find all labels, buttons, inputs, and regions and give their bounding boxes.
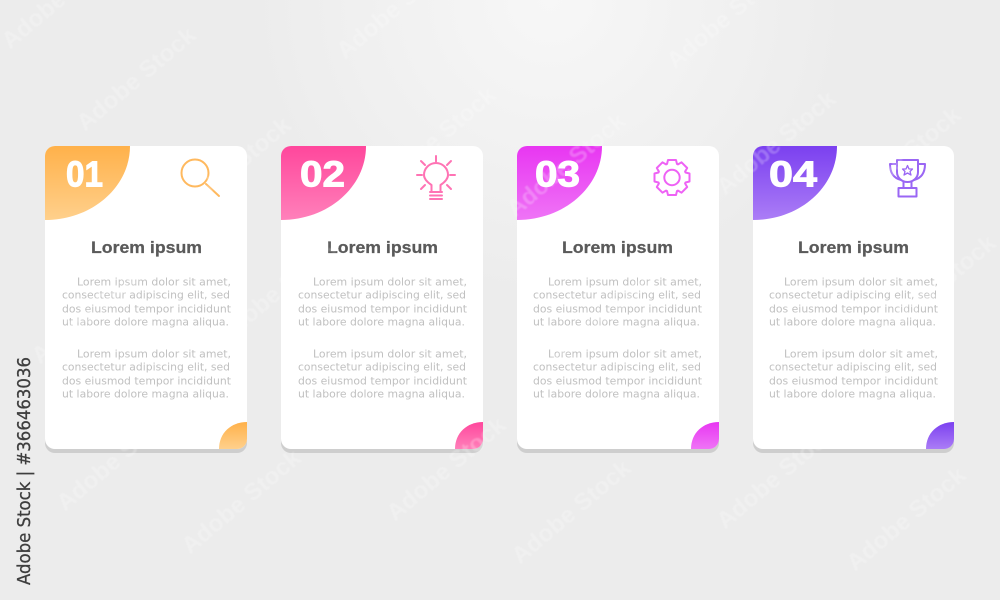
heading 2: Lorem ipsum <box>327 238 438 257</box>
text block 1b: dos eiusmod tempor incididunt <box>62 374 232 388</box>
text block 3b: dos eiusmod tempor incididunt <box>533 374 703 388</box>
text block 4b: dos eiusmod tempor incididunt <box>769 374 939 388</box>
icon: light bulb <box>417 156 455 199</box>
text block 3a: dos eiusmod tempor incididunt <box>533 302 703 316</box>
text block 2b: consectetur adipiscing elit, sed <box>298 360 466 374</box>
text block 2a: dos eiusmod tempor incididunt <box>298 302 468 316</box>
icon: gear <box>654 160 690 195</box>
text block 3a: consectetur adipiscing elit, sed <box>533 288 701 302</box>
text block 1a: ut labore dolore magna aliqua. <box>62 316 229 328</box>
corner tab 01 <box>45 146 130 220</box>
text block 1a: consectetur adipiscing elit, sed <box>62 288 230 302</box>
text block 2a: Lorem ipsum dolor sit amet, <box>313 276 467 288</box>
number 01: 01 <box>66 154 103 194</box>
corner tab 04 <box>753 146 837 220</box>
text block 3b: ut labore dolore magna aliqua. <box>533 388 700 400</box>
text block 4a: consectetur adipiscing elit, sed <box>769 288 937 302</box>
text block 4b: Lorem ipsum dolor sit amet, <box>784 348 938 360</box>
number 02: 02 <box>300 154 345 194</box>
card 2 <box>281 146 483 453</box>
text block 1a <box>62 276 232 328</box>
text block 4b <box>769 348 939 400</box>
text block 4b: ut labore dolore magna aliqua. <box>769 388 936 400</box>
watermark pattern: Adobe Stock <box>167 111 297 227</box>
text block 1b <box>62 348 232 400</box>
watermark pattern: Adobe Stock <box>837 101 967 217</box>
watermark pattern: Adobe Stock <box>27 254 157 370</box>
text block 4a <box>769 276 939 328</box>
corner accent 1 <box>219 422 247 449</box>
text block 1a: dos eiusmod tempor incididunt <box>62 302 232 316</box>
text block 1a: Lorem ipsum dolor sit amet, <box>77 276 231 288</box>
watermark pattern: Adobe Stock <box>507 454 637 570</box>
card 1 <box>45 146 247 453</box>
watermark pattern: Adobe Stock <box>372 81 502 197</box>
text block 2b: ut labore dolore magna aliqua. <box>298 388 465 400</box>
text block 2a <box>298 276 468 328</box>
watermark pattern: Adobe Stock <box>842 461 972 577</box>
watermark pattern: Adobe Stock <box>382 411 512 527</box>
number 04: 04 <box>769 154 817 194</box>
watermark pattern: Adobe Stock <box>502 107 632 223</box>
corner accent 2 <box>455 422 483 449</box>
text block 2b <box>298 348 468 400</box>
heading 3: Lorem ipsum <box>562 238 673 257</box>
text block 1b: ut labore dolore magna aliqua. <box>62 388 229 400</box>
watermark pattern: Adobe Stock <box>72 21 202 137</box>
text block 2b: Lorem ipsum dolor sit amet, <box>313 348 467 360</box>
corner accent 3 <box>691 422 719 449</box>
watermark pattern: Adobe Stock <box>52 401 182 517</box>
corner tab 03 <box>517 146 602 220</box>
text block 3a: Lorem ipsum dolor sit amet, <box>548 276 702 288</box>
text block 4b: consectetur adipiscing elit, sed <box>769 360 937 374</box>
watermark pattern: Adobe Stock <box>712 85 842 201</box>
text block 1b: consectetur adipiscing elit, sed <box>62 360 230 374</box>
heading 1: Lorem ipsum <box>91 238 202 257</box>
text block 2a: consectetur adipiscing elit, sed <box>298 288 466 302</box>
heading 4: Lorem ipsum <box>798 238 909 257</box>
icon: trophy <box>890 160 925 196</box>
text block 2b: dos eiusmod tempor incididunt <box>298 374 468 388</box>
text block 3a <box>533 276 703 328</box>
card 3 <box>517 146 719 453</box>
text block 1b: Lorem ipsum dolor sit amet, <box>77 348 231 360</box>
corner accent 4 <box>926 422 954 449</box>
text block 3b <box>533 348 703 400</box>
watermark pattern: Adobe Stock <box>177 444 307 560</box>
watermark pattern: Adobe Stock <box>712 419 842 535</box>
text block 4a: dos eiusmod tempor incididunt <box>769 302 939 316</box>
text block 3a: ut labore dolore magna aliqua. <box>533 316 700 328</box>
icon: magnifying glass <box>182 160 219 196</box>
corner tab 02 <box>281 146 366 220</box>
stock credit: Adobe Stock | #366463036 <box>15 357 35 585</box>
text block 3b: consectetur adipiscing elit, sed <box>533 360 701 374</box>
number 03: 03 <box>535 154 580 194</box>
watermark pattern: Adobe Stock <box>872 229 1000 345</box>
card 4 <box>753 146 954 453</box>
watermark pattern: Adobe Stock <box>542 254 672 370</box>
text block 3b: Lorem ipsum dolor sit amet, <box>548 348 702 360</box>
text block 2a: ut labore dolore magna aliqua. <box>298 316 465 328</box>
text block 4a: Lorem ipsum dolor sit amet, <box>784 276 938 288</box>
watermark pattern: Adobe Stock <box>212 234 342 350</box>
text block 4a: ut labore dolore magna aliqua. <box>769 316 936 328</box>
